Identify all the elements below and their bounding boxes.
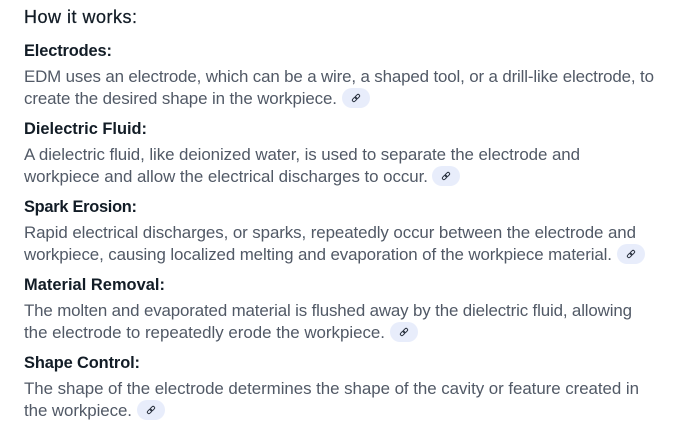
- heading: dielectric fluid: Dielectric Fluid:: [24, 120, 147, 138]
- text: dielectric fluid description: [23, 145, 580, 186]
- text: shape control description: the workpiece.: [24, 401, 132, 420]
- heading: electrodes: Electrodes:: [24, 42, 112, 60]
- heading: material removal: Material Removal:: [24, 276, 165, 294]
- section: spark erosion: [23, 198, 645, 264]
- icon: link chip: [390, 322, 418, 342]
- text: dielectric fluid description: A dielectric fluid, like deionized water, is used to separate the electrode and: [24, 145, 580, 164]
- heading: shape control: Shape Control:: [24, 354, 140, 372]
- text: electrodes description: [24, 67, 654, 108]
- icon: link chip: [617, 244, 645, 264]
- section: electrodes: [24, 42, 654, 108]
- section: material removal: [24, 276, 632, 342]
- section: dielectric fluid: [23, 120, 580, 186]
- text: shape control description: [24, 379, 639, 420]
- text: material removal description: The molten and evaporated material is flushed away by the dielectric fluid, allowing: [24, 301, 632, 320]
- text: electrodes description: create the desired shape in the workpiece.: [24, 89, 337, 108]
- text: dielectric fluid description: workpiece and allow the electrical discharges to occur.: [23, 167, 428, 186]
- text: spark erosion description: [23, 223, 636, 264]
- icon: link chip: [432, 166, 460, 186]
- icon: link chip: [137, 400, 165, 420]
- text: material removal description: [24, 301, 632, 342]
- text: shape control description: The shape of the electrode determines the shape of the cavity or feature created in: [24, 379, 639, 398]
- heading: spark erosion: Spark Erosion:: [24, 198, 137, 216]
- title: How it works:: [24, 7, 137, 27]
- text: spark erosion description: Rapid electrical discharges, or sparks, repeatedly occur between the electrode and: [24, 223, 636, 242]
- icon: link chip: [342, 88, 370, 108]
- text: material removal description: the electrode to repeatedly erode the workpiece.: [24, 323, 385, 342]
- text: electrodes description: EDM uses an electrode, which can be a wire, a shaped tool, or a drill-like electrode, to: [24, 67, 654, 86]
- section: shape control: [24, 354, 639, 420]
- text: spark erosion description: workpiece, causing localized melting and evaporation of the workpiece material.: [23, 245, 612, 264]
